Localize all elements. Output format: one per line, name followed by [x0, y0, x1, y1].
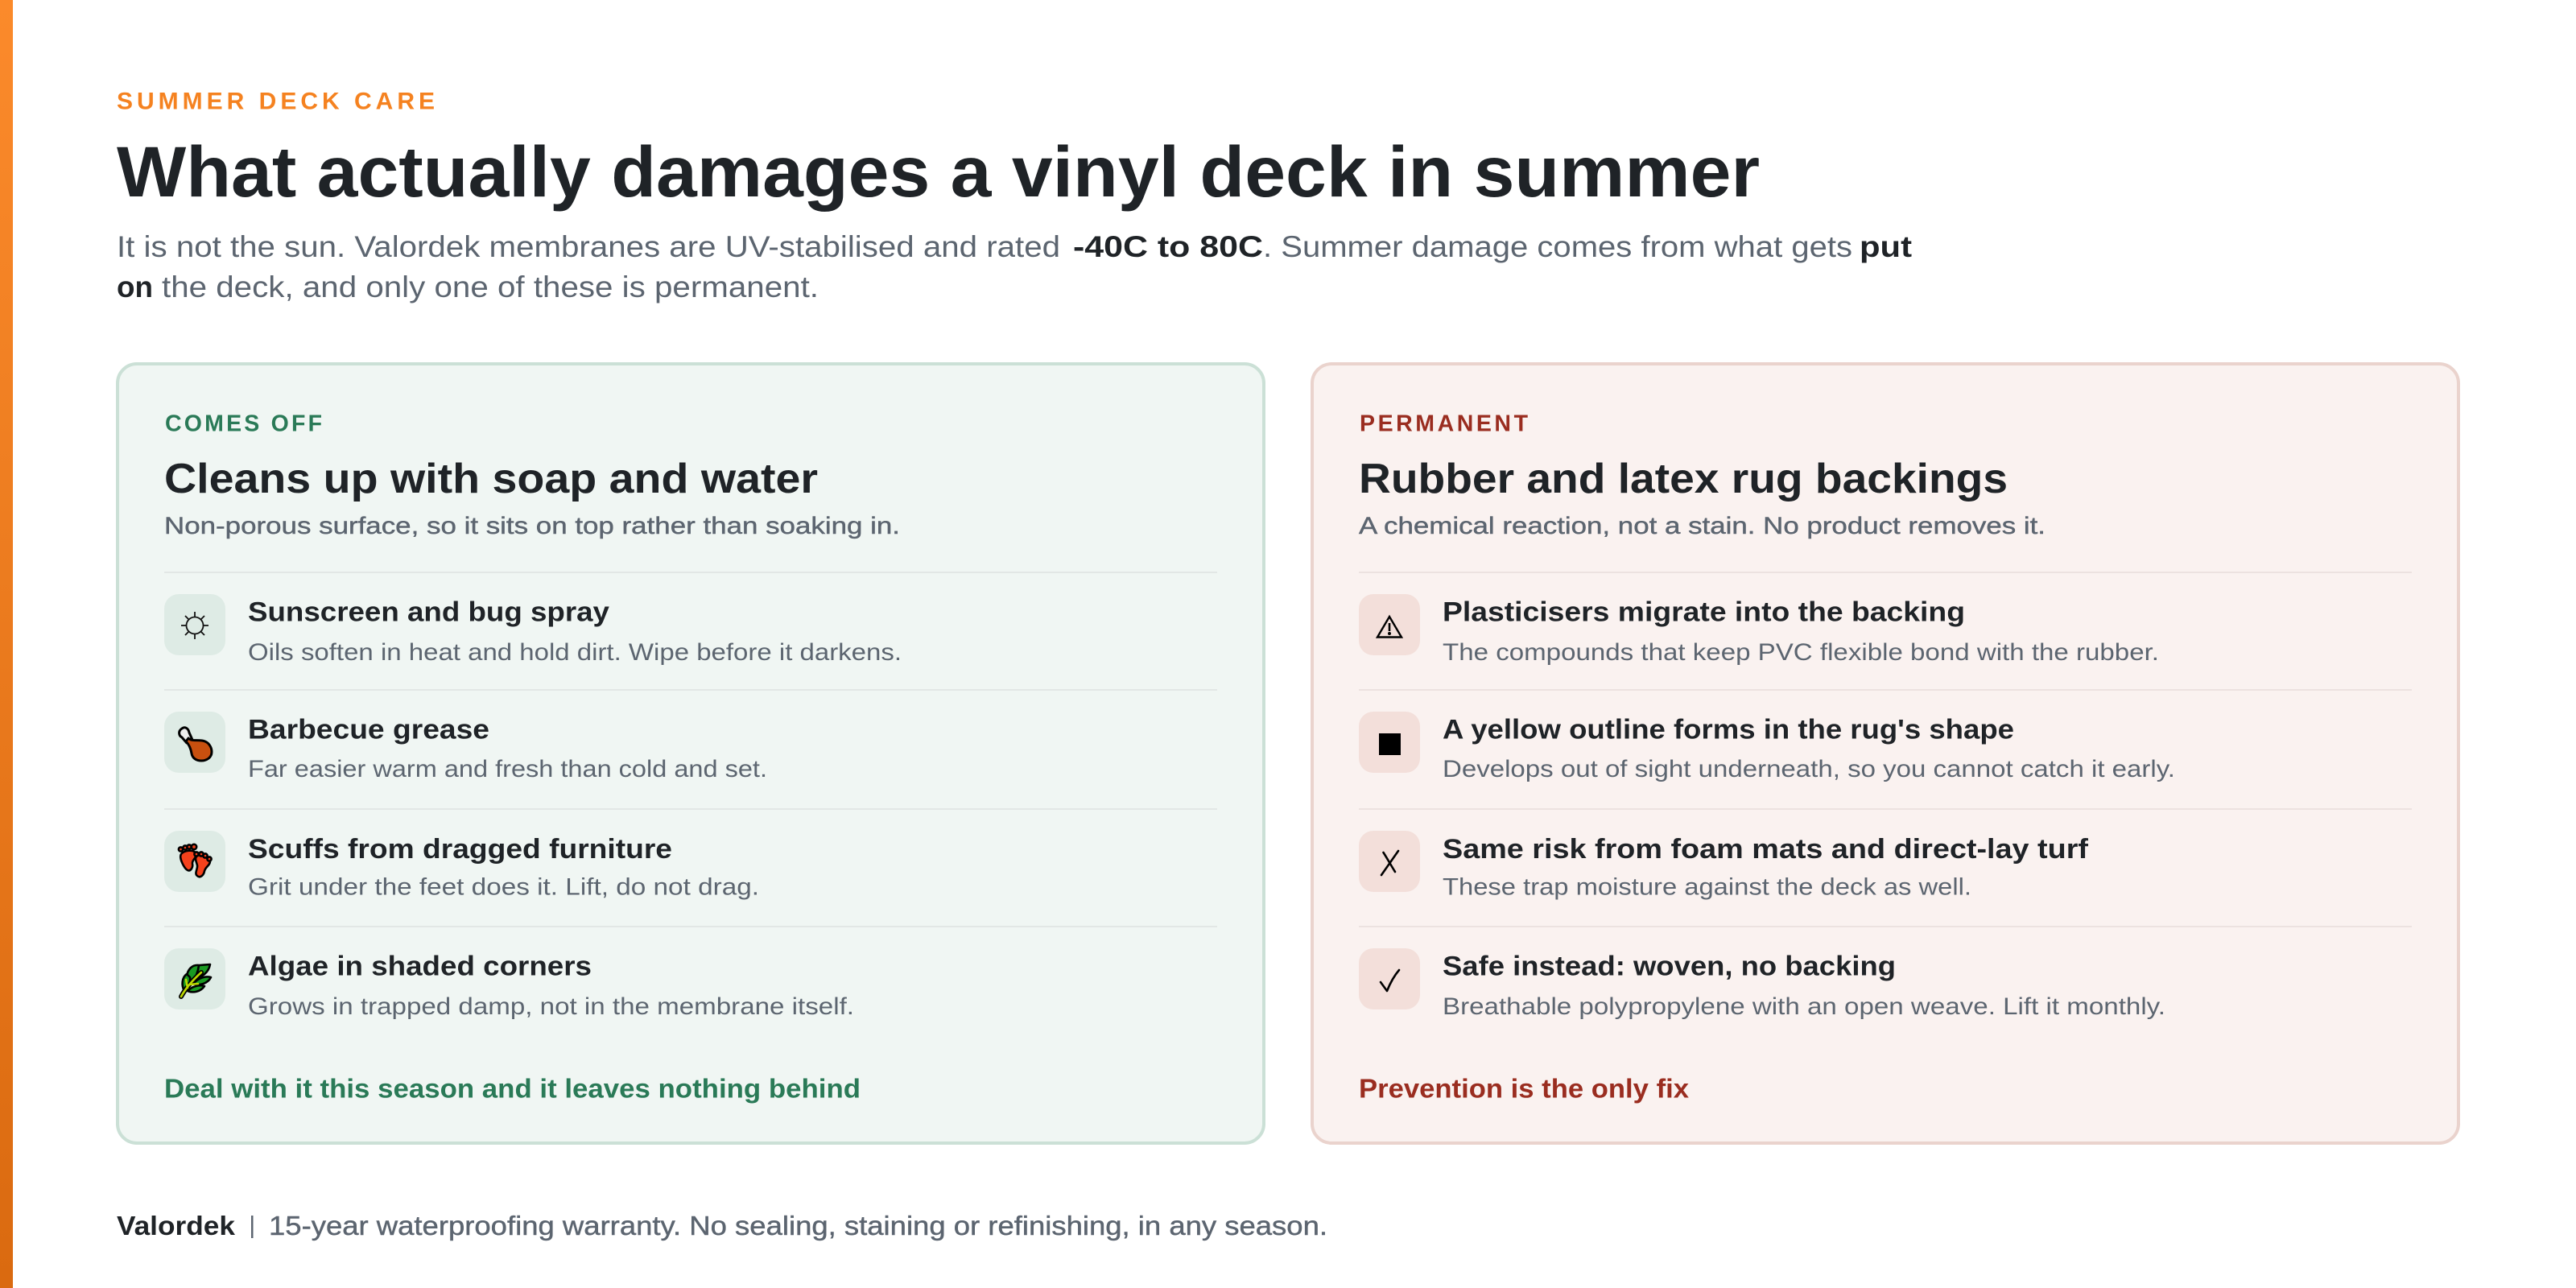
- footer: Valordek: [117, 1211, 236, 1241]
- row description: Grows in trapped damp, not in the membrane itself.: [248, 993, 854, 1020]
- footer: 15-year waterproofing warranty. No sealing, staining or refinishing, in any season.: [269, 1211, 1327, 1241]
- row description: Grit under the feet does it. Lift, do not drag.: [248, 874, 759, 900]
- row title: Safe instead: woven, no backing: [1443, 952, 1896, 982]
- row: algae: [164, 948, 854, 1020]
- icon: footprints: [164, 831, 225, 892]
- panel takeaway: Deal with it this season and it leaves nothing behind: [164, 1074, 861, 1103]
- icon: check mark: [1359, 948, 1420, 1009]
- panel heading: Cleans up with soap and water: [164, 456, 818, 502]
- panel: permanent: [1312, 364, 2458, 1143]
- panel subheading: A chemical reaction, not a stain. No product removes it.: [1359, 513, 2046, 539]
- row: barbecue grease: [164, 712, 767, 782]
- title: What actually damages a vinyl deck in summer: [117, 131, 1760, 212]
- icon: drumstick: [164, 712, 225, 773]
- row description: Oils soften in heat and hold dirt. Wipe before it darkens.: [248, 639, 902, 666]
- row title: A yellow outline forms in the rug's shape: [1443, 715, 2014, 745]
- orange accent bar: [0, 0, 13, 1288]
- row description: The compounds that keep PVC flexible bond with the rubber.: [1443, 639, 2159, 666]
- icon: cross: [1359, 831, 1420, 892]
- intro text: It is not the sun. Valordek membranes are UV-stabilised and rated: [117, 230, 1060, 263]
- intro text: put: [1860, 230, 1912, 263]
- intro text: [117, 230, 1912, 303]
- row title: Sunscreen and bug spray: [248, 597, 609, 628]
- row title: Algae in shaded corners: [248, 952, 592, 982]
- icon: leaf: [164, 948, 225, 1009]
- row: yellow outline: [1359, 712, 2175, 782]
- row: plasticisers: [1359, 594, 2159, 666]
- panel subheading: Non-porous surface, so it sits on top rather than soaking in.: [164, 513, 900, 539]
- icon: black square: [1359, 712, 1420, 773]
- intro text: . Summer damage comes from what gets: [1263, 230, 1852, 263]
- panel label: comes off: COMES OFF: [165, 411, 322, 436]
- intro text: on: [117, 270, 153, 303]
- row description: Far easier warm and fresh than cold and set.: [248, 756, 767, 782]
- panel takeaway: Prevention is the only fix: [1359, 1074, 1690, 1103]
- intro text: the deck, and only one of these is permanent.: [162, 270, 819, 303]
- intro text: -40C to 80C: [1073, 230, 1263, 263]
- eyebrow: SUMMER DECK CARE: [117, 89, 435, 114]
- row: sunscreen: [164, 594, 902, 666]
- row title: Scuffs from dragged furniture: [248, 834, 672, 865]
- panel: comes off: [118, 364, 1264, 1143]
- row title: Barbecue grease: [248, 715, 489, 745]
- row title: Plasticisers migrate into the backing: [1443, 597, 1965, 628]
- row description: These trap moisture against the deck as well.: [1443, 874, 1971, 900]
- row title: Same risk from foam mats and direct-lay turf: [1443, 834, 2089, 865]
- icon: warning triangle: [1359, 594, 1420, 655]
- row description: Breathable polypropylene with an open weave. Lift it monthly.: [1443, 993, 2165, 1020]
- row: foam mats: [1359, 831, 2089, 900]
- row description: Develops out of sight underneath, so you cannot catch it early.: [1443, 756, 2175, 782]
- icon: sun: [164, 594, 225, 655]
- row: safe instead: [1359, 948, 2165, 1020]
- panel heading: Rubber and latex rug backings: [1359, 456, 2008, 502]
- panel label: permanent: PERMANENT: [1360, 411, 1529, 436]
- row: scuffs: [164, 831, 759, 900]
